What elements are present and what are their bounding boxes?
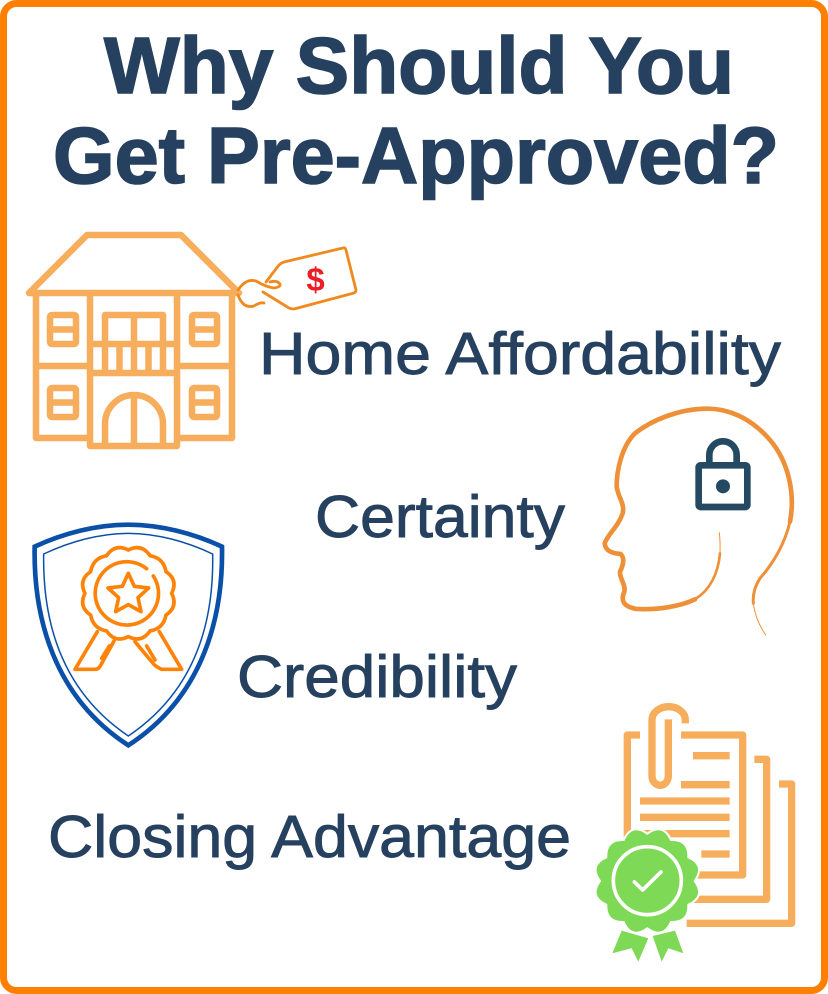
padlock [699,441,747,507]
award badge [75,548,182,669]
dollar sign: $ [306,261,325,298]
icon: shield with award badge [35,525,222,745]
icon: head with padlock [605,409,792,635]
documents [627,707,792,923]
title: Why Should You [104,21,734,110]
icon: house with price tag [29,235,356,446]
house [29,235,239,446]
icon: documents with approval seal [596,707,792,962]
price tag [238,248,356,309]
shield outline [35,525,222,745]
label: closing advantage: Closing Advantage [48,804,571,870]
label: credibility: Credibility [237,644,518,710]
label: certainty: Certainty [315,484,566,550]
title: Get Pre-Approved? [53,111,779,200]
label: home affordability: Home Affordability [259,321,782,387]
title [53,21,779,200]
head outline [605,409,792,635]
approval seal [596,829,699,962]
